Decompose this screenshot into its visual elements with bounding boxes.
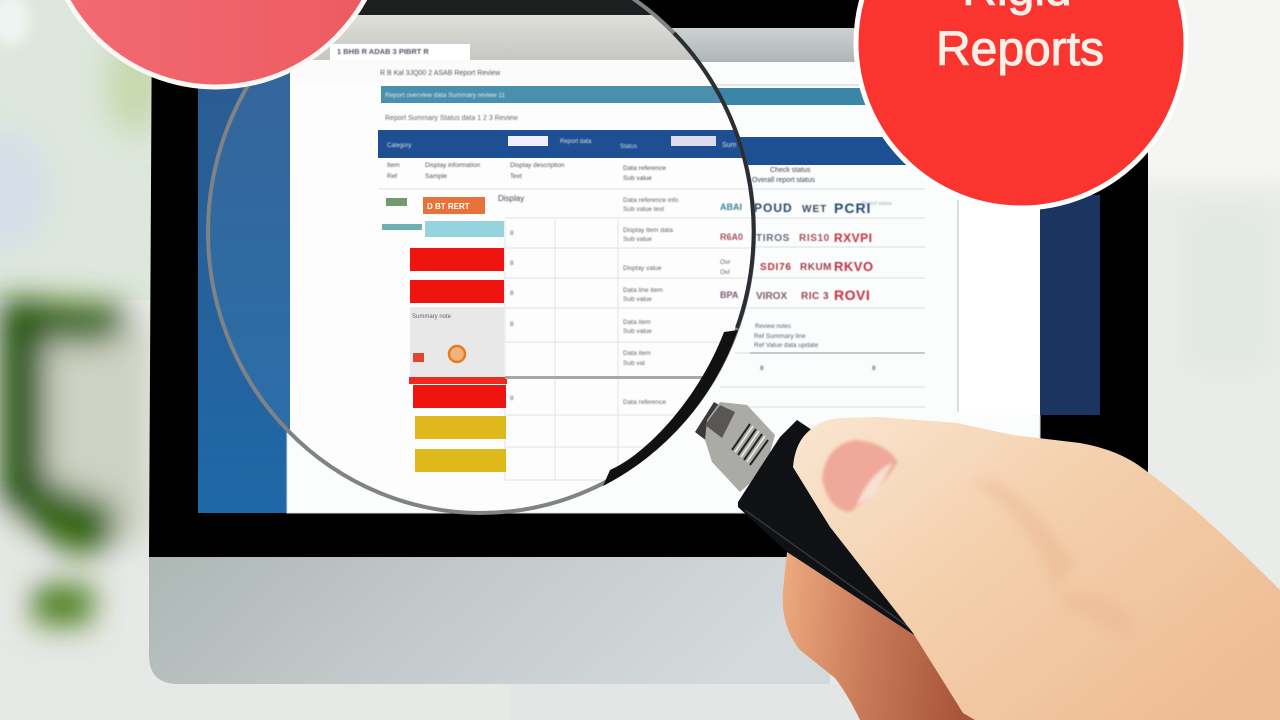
palm and thumb	[793, 417, 1280, 720]
hand	[783, 417, 1280, 720]
blurred green plant	[0, 298, 150, 625]
fingers below handle	[783, 552, 975, 720]
row status values: TIROS	[756, 233, 790, 244]
row text: Ovr	[720, 259, 731, 266]
monitor stand	[510, 684, 860, 720]
magnified view inside lens: Report overview data Summary review 11	[385, 92, 506, 99]
row text: Sub val	[623, 360, 645, 367]
row text: Sub value	[623, 328, 652, 335]
table header text: Data reference	[623, 165, 666, 172]
row status values: R6A0	[721, 233, 747, 244]
table header text: Overall report status	[752, 177, 816, 184]
row status values: SDI76	[760, 262, 792, 273]
table header text: Ref	[387, 173, 397, 180]
magnified view inside lens: Report Summary Status data 1 2 3 Review	[385, 115, 519, 122]
monitor bezel	[149, 0, 1148, 684]
report table, outside lens	[720, 167, 925, 407]
row text: Ovl	[720, 269, 730, 276]
row text: Display value	[623, 265, 662, 272]
row status values: RIC 3	[801, 291, 829, 302]
left status cells	[386, 198, 407, 206]
table header text: Display information	[425, 162, 481, 169]
table header text: Sample	[425, 173, 447, 180]
table header text: Sub value	[623, 175, 652, 182]
row text: Display item data	[623, 227, 673, 234]
badge text: Reports	[936, 23, 1104, 76]
row status values	[721, 200, 874, 303]
magnified view inside lens: Summary note	[412, 314, 452, 320]
row text: Data reference info	[623, 197, 679, 204]
row text: 8	[510, 230, 514, 237]
row status values: WET	[802, 204, 827, 215]
row status values: BPA1	[721, 291, 747, 302]
report table, outside lens: Review notes	[755, 324, 791, 330]
lens rim	[208, 0, 754, 513]
row status values: RKUM	[800, 262, 832, 273]
table header text: Text	[510, 173, 522, 180]
row text: Sub value	[623, 236, 652, 243]
table grid	[378, 189, 760, 480]
browser tab	[330, 44, 470, 60]
row text: ABAI	[720, 202, 742, 212]
row text: R6A0	[720, 232, 743, 242]
row text: 8	[510, 395, 514, 402]
report table, outside lens: 8	[760, 365, 764, 372]
row text: 8	[510, 260, 514, 267]
ferrule	[695, 402, 775, 492]
magnified view inside lens: Report data	[560, 139, 592, 145]
magnifying glass	[208, 0, 917, 637]
row text: 8	[510, 321, 514, 328]
row status values: ABAN	[721, 203, 755, 215]
row text: 8	[510, 290, 514, 297]
table header text: Report status	[862, 201, 892, 207]
row text: Sub value text	[623, 206, 664, 213]
table header text: Display description	[510, 162, 565, 169]
table header	[378, 130, 758, 158]
row text: Display	[498, 194, 524, 203]
row text: Data item	[623, 319, 651, 326]
row status values: RXVPI	[834, 231, 873, 245]
table header text: Item	[387, 162, 400, 169]
table header text	[387, 162, 666, 182]
row status values: POUD	[754, 201, 793, 215]
report table, outside lens: 8	[872, 365, 876, 372]
magnified view inside lens: D BT RERT	[427, 202, 470, 211]
row text: BPA	[720, 290, 739, 300]
row text: Data reference	[623, 399, 666, 406]
row status values: RKVO	[834, 259, 874, 274]
row status values: VIROX	[756, 291, 787, 302]
monitor screen	[198, 28, 1100, 513]
row text: Data line item	[623, 287, 663, 294]
badge: rigid reports	[856, 0, 1186, 208]
row text: Data item	[623, 350, 651, 357]
magnified view inside lens: R B Kal 3JQ00 2 ASAB Report Review	[380, 70, 501, 77]
thumbnail	[822, 440, 898, 512]
table header text	[752, 167, 892, 207]
row status values: ROVI	[834, 287, 870, 303]
magnified view inside lens: Category	[387, 143, 411, 149]
magnified view inside lens: 1 BHB R ADAB 3 PIBRT R	[337, 47, 429, 56]
magnified view inside lens: Status	[620, 144, 637, 150]
badge: left	[46, 0, 386, 87]
row status values: PCRI	[834, 200, 871, 216]
magnified view inside lens	[210, 0, 752, 480]
table header text: Check status	[770, 167, 811, 174]
handle	[738, 420, 917, 637]
magnified view inside lens: Sum	[722, 142, 737, 149]
row text	[498, 194, 743, 406]
report table, outside lens: Ref Value data update	[754, 342, 819, 349]
row text: Sub value	[623, 296, 652, 303]
teal bar	[381, 86, 722, 103]
row status values: RIS10	[799, 233, 830, 244]
report table, outside lens: Ref Summary line	[754, 333, 806, 340]
